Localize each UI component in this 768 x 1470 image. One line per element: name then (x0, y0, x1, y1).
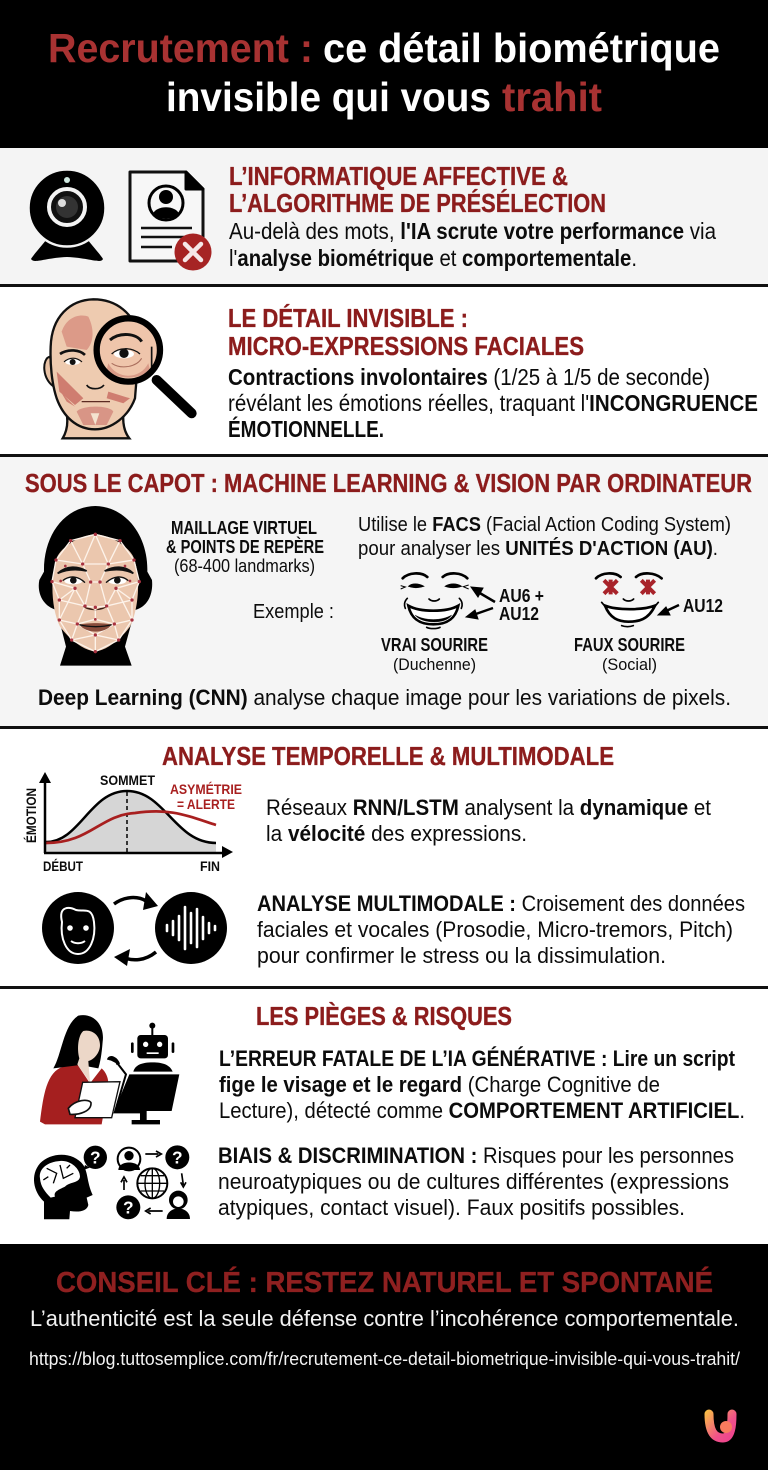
icon: brain in head with question: ? (90, 1148, 101, 1168)
caption: vrai sourire (381, 635, 488, 674)
text: biais et discrimination: neuroatypiques ou de cultures différentes (expressions (218, 1169, 729, 1194)
label: AU6 + AU12: AU6 + (499, 586, 544, 606)
chart: emotion curve: FIN (200, 858, 220, 874)
label: AU6 + AU12 (499, 586, 544, 624)
icon: rejected CV document (130, 172, 212, 270)
mesh label: (68-400 landmarks) (174, 556, 315, 576)
FACS text (358, 514, 731, 560)
icon: voice waveform circle (155, 892, 227, 964)
text: analyse multimodale: pour confirmer le stress ou la dissimulation. (257, 943, 666, 968)
text: biais et discrimination: atypiques, contact visuel). Faux positifs possibles. (218, 1195, 685, 1220)
text: biais et discrimination: BIAIS & DISCRIMINATION : Risques pour les personnes (218, 1143, 734, 1168)
panel: micro-expressions (0, 287, 768, 454)
text block (229, 218, 716, 271)
title (48, 25, 720, 120)
text block: l'analyse biométrique et comportementale. (229, 245, 637, 271)
mesh label: & POINTS DE REPÈRE (166, 536, 324, 557)
footer heading: CONSEIL CLÉ : RESTEZ NATUREL ET SPONTANÉ (56, 1265, 713, 1299)
heading (228, 303, 584, 361)
text: RNN/LSTM: Réseaux RNN/LSTM analysent la dynamique et (266, 795, 711, 820)
text: RNN/LSTM: la vélocité des expressions. (266, 821, 527, 846)
chart: emotion curve: ÉMOTION (23, 788, 39, 843)
chart: emotion curve: ASYMÉTRIE (170, 781, 242, 797)
icon: global network with questions (116, 1145, 190, 1219)
arrow: AU12 (658, 605, 679, 615)
panel: sous le capot (0, 457, 768, 726)
caption: vrai sourire: (Duchenne) (393, 655, 476, 674)
caption: faux sourire (574, 635, 685, 674)
heading: MICRO-EXPRESSIONS FACIALES (228, 331, 584, 361)
icon: true smile face (401, 573, 469, 629)
heading: LE DÉTAIL INVISIBLE : (228, 303, 468, 333)
chart: emotion curve: SOMMET (100, 772, 155, 788)
icon: global network with questions: ? (123, 1198, 134, 1218)
text: analyse multimodale (257, 891, 745, 968)
panel: conseil clé footer (0, 1244, 768, 1470)
panel: analyse temporelle (0, 729, 768, 986)
heading: L’INFORMATIQUE AFFECTIVE & (229, 161, 568, 191)
text block: révélant les émotions réelles, traquant l'INCONGRUENCE (228, 390, 758, 416)
title: trahit (502, 74, 602, 120)
caption: faux sourire: FAUX SOURIRE (574, 635, 685, 655)
chart: emotion curve (23, 772, 242, 874)
caption: faux sourire: (Social) (602, 655, 657, 674)
text block: Contractions involontaires (1/25 à 1/5 de seconde) (228, 364, 710, 390)
arrows: AU6 and AU12 (466, 587, 495, 619)
FACS text: Utilise le FACS (Facial Action Coding System) (358, 514, 731, 536)
icon: logo (709, 1414, 732, 1438)
icon: anatomical face with magnifier (44, 299, 192, 438)
text: erreur fatale (219, 1046, 745, 1123)
heading: ANALYSE TEMPORELLE & MULTIMODALE (162, 741, 614, 771)
text: RNN/LSTM (266, 795, 711, 846)
text: erreur fatale: Lecture), détecté comme COMPORTEMENT ARTIFICIEL. (219, 1098, 745, 1123)
heading: L’ALGORITHME DE PRÉSÉLECTION (229, 188, 606, 218)
text block: Au-delà des mots, l'IA scrute votre performance via (229, 218, 716, 244)
label: AU6 + AU12: AU12 (499, 604, 539, 624)
mesh label: MAILLAGE VIRTUEL (171, 518, 317, 538)
icon: brain in head with question (34, 1146, 107, 1219)
arrows: exchange between face and voice (114, 892, 158, 966)
text block: ÉMOTIONNELLE. (228, 415, 384, 442)
title: invisible qui vous (166, 74, 491, 120)
chart: emotion curve: DÉBUT (43, 858, 83, 874)
icon: woman reading script with robot (40, 1015, 179, 1124)
chart: emotion curve: = ALERTE (177, 796, 235, 812)
icon: face mesh with landmarks (39, 506, 152, 666)
panel: informatique affective (0, 148, 768, 284)
text block (228, 364, 758, 442)
text: biais et discrimination (218, 1143, 734, 1220)
icon: face circle (42, 892, 114, 964)
mesh label (166, 518, 324, 576)
panel: pièges et risques (0, 989, 768, 1244)
footer text: L’authenticité est la seule défense contre l’incohérence comportementale. (30, 1306, 739, 1331)
text: erreur fatale: fige le visage et le regard (Charge Cognitive de (219, 1072, 660, 1097)
heading: LES PIÈGES & RISQUES (256, 1001, 512, 1031)
icon: webcam (28, 170, 106, 261)
FACS text: pour analyser les UNITÉS D'ACTION (AU). (358, 537, 718, 560)
title: Recrutement : (48, 25, 313, 71)
label: AU12: AU12 (683, 596, 723, 616)
example label: Exemple : (253, 601, 334, 623)
text: analyse multimodale: ANALYSE MULTIMODALE : Croisement des données (257, 891, 745, 916)
text: analyse multimodale: faciales et vocales (Prosodie, Micro-tremors, Pitch) (257, 917, 733, 942)
icon: global network with questions: ? (172, 1148, 183, 1168)
heading (229, 161, 606, 218)
caption: vrai sourire: VRAI SOURIRE (381, 635, 488, 655)
text: deep learning: Deep Learning (CNN) analyse chaque image pour les variations de pixels. (38, 685, 731, 710)
title: ce détail biométrique (323, 25, 720, 71)
icon: fake smile face (596, 573, 662, 627)
source url: https://blog.tuttosemplice.com/fr/recrutement-ce-detail-biometrique-invisible-qui-vous-trahit/ (29, 1349, 740, 1369)
